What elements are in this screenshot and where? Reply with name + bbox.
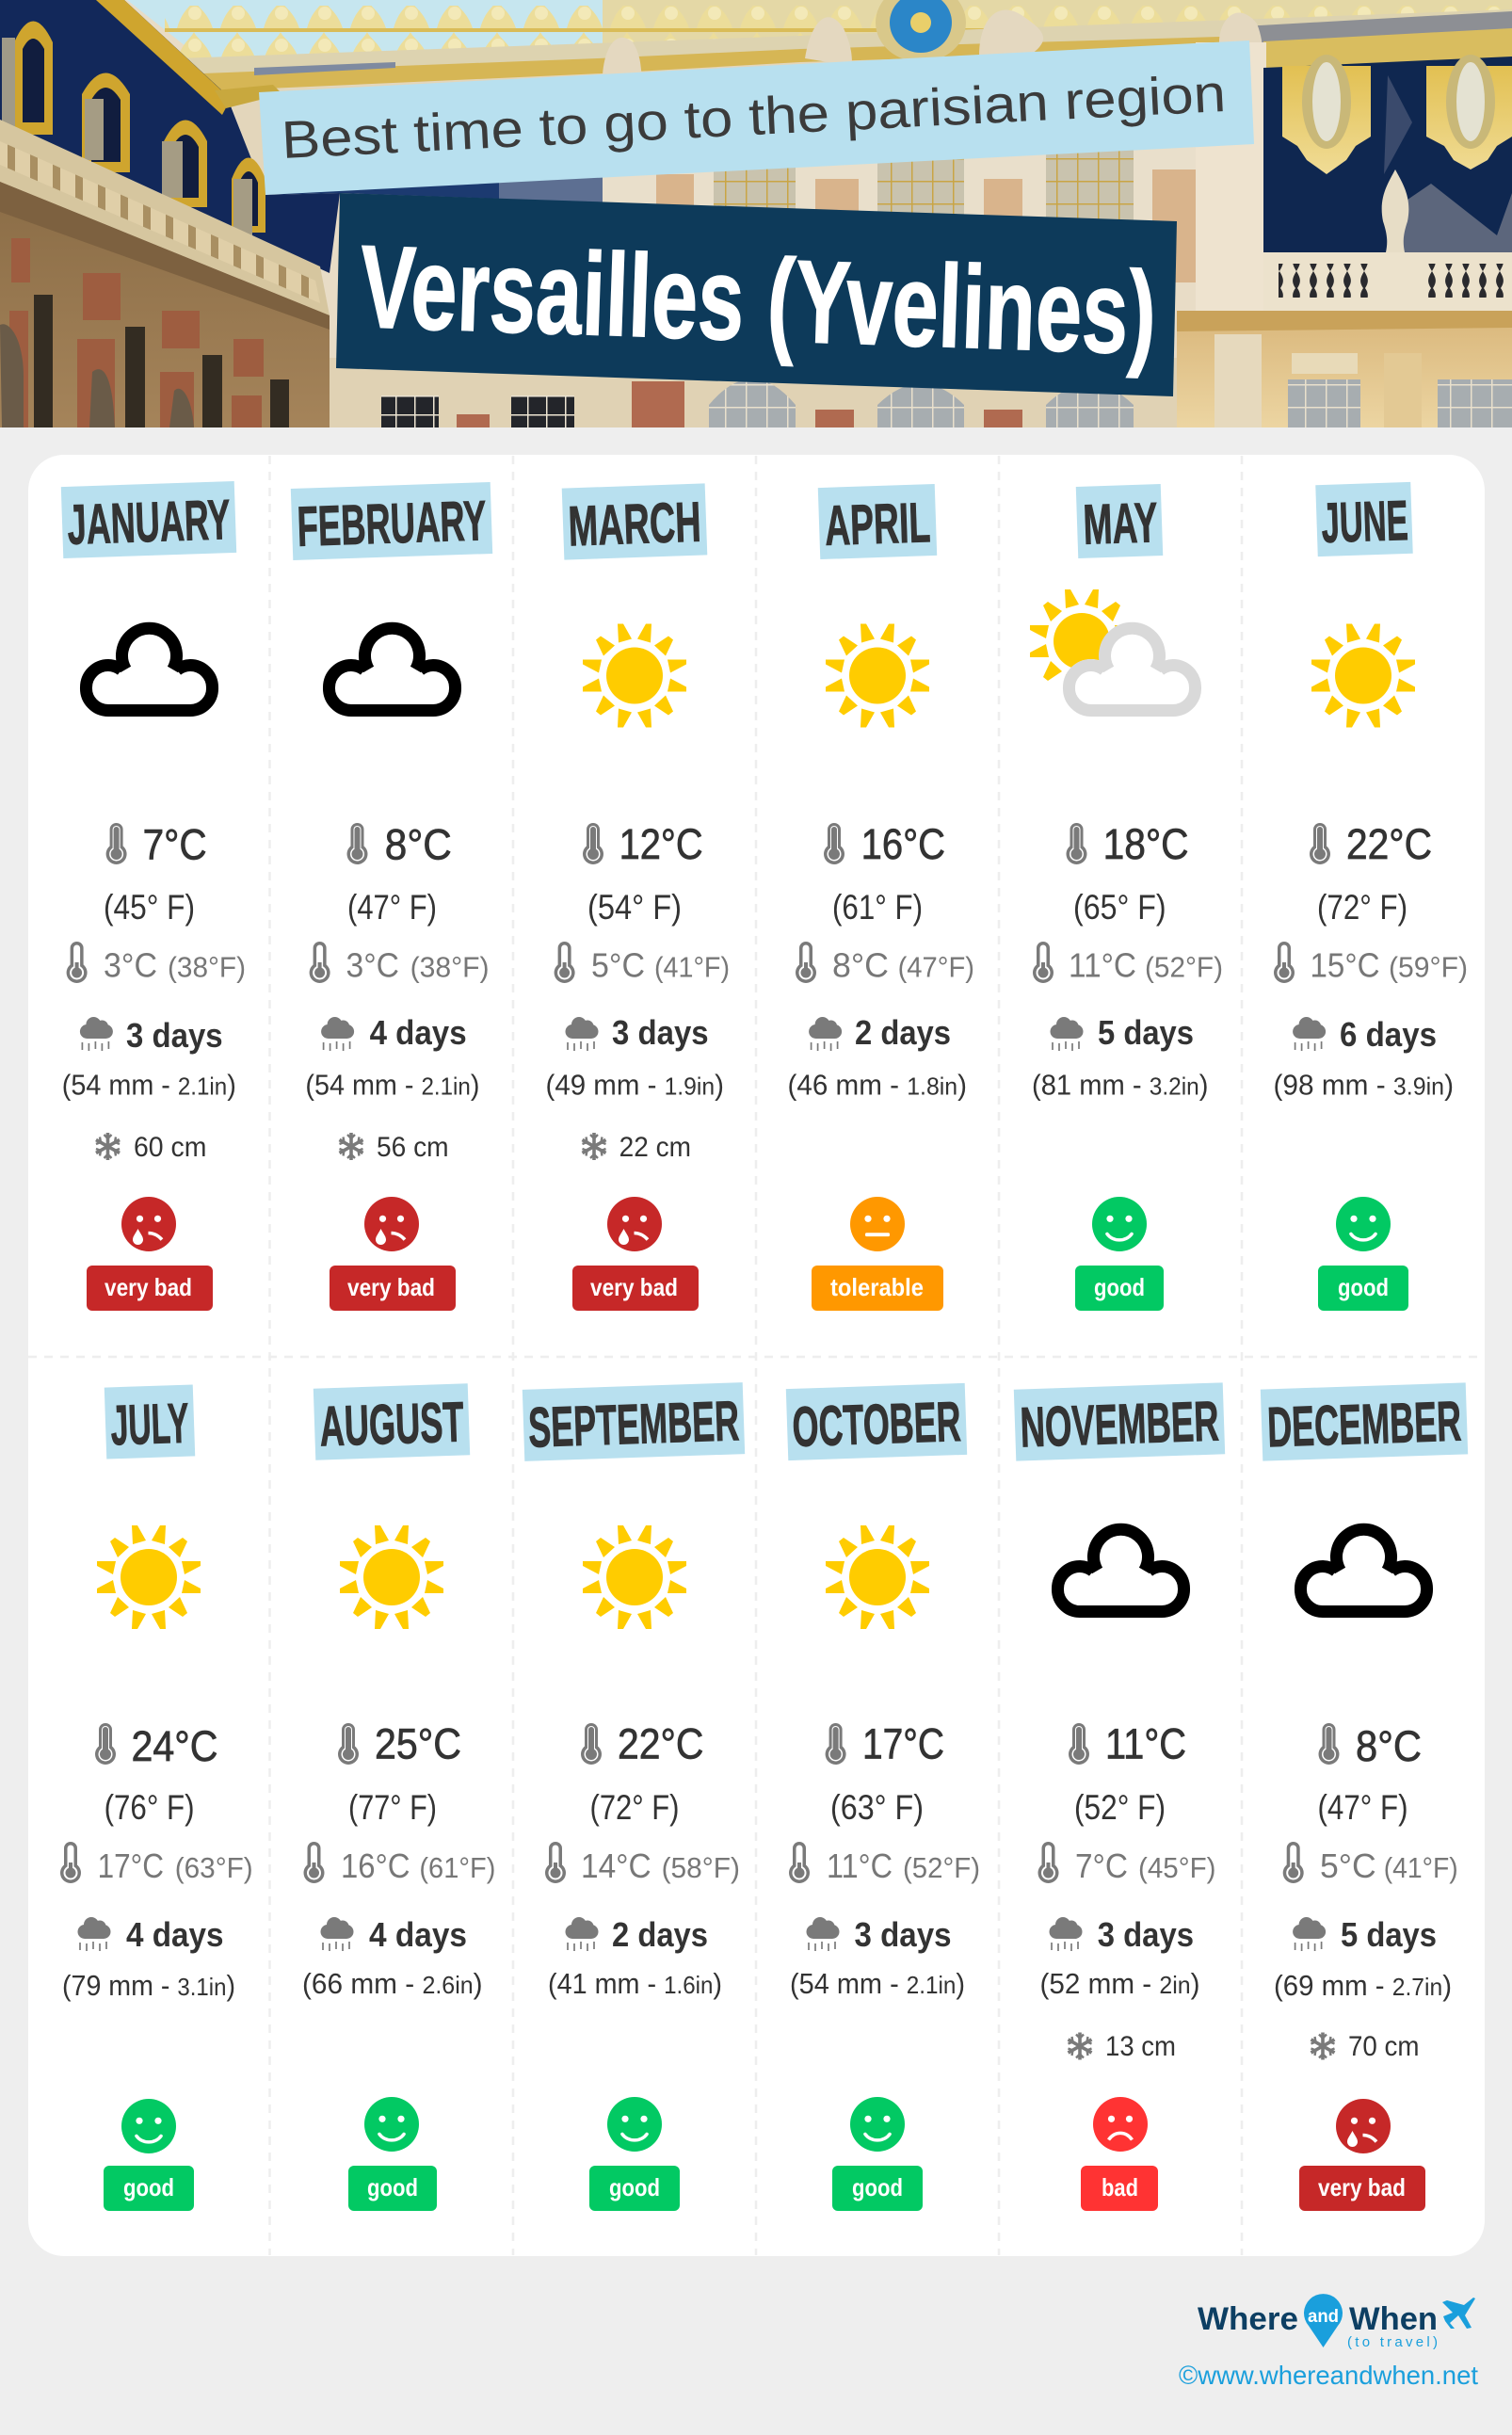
rainy days (1293, 1015, 1437, 1054)
average temperature (1310, 820, 1432, 927)
panel: july (60, 1384, 253, 2211)
low temperature: 5°C (1320, 1846, 1376, 1885)
precipitation: (81 mm - 3.2in) (1032, 1068, 1209, 1102)
panel: june (1273, 482, 1468, 1311)
average temperature (338, 1719, 461, 1827)
rating badge: good (1075, 1266, 1164, 1311)
rating face: very bad (364, 1197, 419, 1251)
average temperature: 16°C (861, 820, 945, 868)
rainy days (1293, 1915, 1437, 1954)
month label: august: AUGUST (319, 1390, 465, 1459)
rating badge: tolerable: tolerable (830, 1273, 924, 1301)
rainy days: 6 days (1340, 1015, 1437, 1054)
left balustrade and facade (0, 182, 330, 427)
average temperature: (47° F) (1318, 1788, 1408, 1827)
weather icon: sun (1311, 623, 1415, 727)
low temperature: 16°C (341, 1846, 410, 1885)
rating badge: good: good (123, 2173, 174, 2201)
average temperature: (52° F) (1074, 1788, 1166, 1827)
precipitation: (54 mm - 2.1in) (305, 1068, 479, 1102)
snowfall: 70 cm (1348, 2031, 1420, 2062)
month label: june: JUNE (1320, 489, 1409, 555)
rainy days: 4 days (370, 1013, 467, 1052)
average temperature: (47° F) (347, 888, 437, 927)
rainy days (1051, 1013, 1194, 1052)
month label: august (314, 1383, 470, 1460)
logo: Where and When: When (1349, 2301, 1438, 2337)
rating badge: good: good (609, 2173, 660, 2201)
rainy days (565, 1915, 708, 1954)
month label: june (1315, 482, 1413, 556)
rainy days: 5 days (1341, 1915, 1437, 1954)
weather icon: cloud (86, 628, 213, 710)
precipitation: (66 mm - 2.6in) (302, 1967, 483, 2000)
average temperature: (72° F) (1317, 888, 1407, 927)
low temperature (1274, 942, 1468, 985)
month label: january: JANUARY (67, 488, 232, 556)
average temperature (583, 820, 703, 927)
right roof, oval windows, balustrade (1196, 42, 1266, 315)
average temperature: 12°C (619, 820, 703, 868)
precipitation: (49 mm - 1.9in) (546, 1068, 724, 1102)
icon: airplane (1442, 2298, 1475, 2329)
low temperature: (41°F) (1384, 1851, 1458, 1884)
average temperature: (45° F) (104, 888, 195, 927)
average temperature (95, 1722, 218, 1827)
weather icon: sun (97, 1525, 201, 1629)
logo: Where and When: Where (1198, 2301, 1298, 2337)
low temperature (1033, 942, 1223, 985)
precipitation: (41 mm - 1.6in) (548, 1967, 722, 2000)
low temperature: 7°C (1075, 1846, 1128, 1885)
rainy days: 4 days (369, 1915, 467, 1954)
panel: december (1261, 1382, 1468, 2211)
average temperature: 24°C (132, 1722, 218, 1770)
rainy days: 3 days (1098, 1915, 1194, 1954)
rainy days (809, 1013, 951, 1052)
panel: april (787, 484, 974, 1311)
low temperature: 17°C (98, 1846, 164, 1885)
snowfall (1311, 2031, 1420, 2062)
average temperature (104, 821, 207, 927)
rainy days (77, 1915, 224, 1954)
rating badge: tolerable (812, 1266, 943, 1311)
panel: may (1030, 484, 1223, 1311)
low temperature: (52°F) (1145, 951, 1223, 983)
rating badge: very bad: very bad (590, 1273, 678, 1301)
low temperature: (61°F) (419, 1851, 495, 1884)
snowfall: 60 cm (134, 1132, 206, 1163)
icon: map pin (1304, 2294, 1343, 2347)
rainy days: 2 days (612, 1915, 708, 1954)
rainy days: 3 days (612, 1013, 709, 1052)
low temperature: (38°F) (410, 951, 490, 983)
header photo: palace of Versailles (0, 0, 1512, 427)
month label: october (786, 1383, 967, 1460)
low temperature: 5°C (591, 945, 645, 985)
average temperature: 22°C (1346, 820, 1432, 868)
low temperature: 3°C (104, 945, 157, 985)
weather icon: sun behind cloud (1030, 589, 1201, 716)
left roof (0, 0, 340, 273)
rainy days: 3 days (126, 1016, 223, 1055)
rating badge: good: good (367, 2173, 418, 2201)
low temperature: (52°F) (903, 1851, 980, 1884)
month label: march (562, 483, 707, 560)
precipitation: (54 mm - 2.1in) (62, 1068, 236, 1102)
average temperature: (61° F) (832, 888, 923, 927)
low temperature (796, 942, 974, 985)
average temperature: 8°C (385, 821, 452, 868)
panel: february (291, 482, 492, 1311)
snowfall (582, 1132, 691, 1163)
rating badge: very bad (572, 1266, 699, 1311)
average temperature (1069, 1719, 1186, 1827)
rating badge: good: good (1094, 1273, 1145, 1301)
month label: april (818, 484, 937, 559)
snowfall (1068, 2031, 1176, 2062)
month label: march: MARCH (567, 491, 702, 557)
panel: january (61, 481, 246, 1311)
average temperature (1066, 820, 1189, 927)
rating badge: bad: bad (1102, 2173, 1138, 2201)
low temperature (1037, 1842, 1216, 1885)
month label: may (1076, 484, 1163, 558)
month label: november: NOVEMBER (1020, 1390, 1220, 1459)
rating face: good (364, 2097, 419, 2152)
average temperature (1318, 1722, 1422, 1827)
rating face: very bad (607, 1197, 662, 1251)
precipitation: (54 mm - 2.1in) (790, 1967, 965, 2000)
month label: february (291, 482, 492, 560)
rainy days (320, 1915, 467, 1954)
panel: march (546, 483, 730, 1311)
month label: october: OCTOBER (792, 1390, 962, 1459)
weather icon: cloud (1300, 1529, 1427, 1612)
low temperature (789, 1842, 980, 1885)
rainy days: 4 days (126, 1915, 224, 1954)
rating badge: very bad (330, 1266, 456, 1311)
low temperature: (47°F) (898, 951, 974, 983)
copyright url: ©www.whereandwhen.net (1179, 2361, 1478, 2390)
rating badge: very bad (87, 1266, 213, 1311)
average temperature: 17°C (862, 1719, 944, 1768)
snowfall: 56 cm (377, 1132, 449, 1163)
rainy days (321, 1013, 467, 1052)
logo: Where and When: (to travel) (1347, 2334, 1438, 2350)
rainy days (806, 1915, 951, 1954)
low temperature: (63°F) (175, 1851, 253, 1884)
rating badge: very bad (1299, 2166, 1425, 2211)
panel: september (523, 1382, 745, 2211)
low temperature: (45°F) (1138, 1851, 1216, 1884)
rating face: good (121, 2099, 176, 2153)
average temperature (346, 821, 452, 927)
rating badge: good (832, 2166, 923, 2211)
title band: Versailles (Yvelines) (358, 221, 1158, 379)
rainy days: 5 days (1098, 1013, 1194, 1052)
low temperature (1283, 1842, 1458, 1885)
icon: map pin: and (1308, 2307, 1339, 2327)
low temperature (310, 942, 490, 985)
precipitation: (52 mm - 2in) (1039, 1967, 1199, 2000)
panel: august (302, 1383, 495, 2211)
low temperature: 11°C (827, 1846, 893, 1885)
rating face: bad (1093, 2097, 1148, 2152)
month label: may: MAY (1082, 491, 1159, 556)
rainy days (1049, 1915, 1194, 1954)
rating badge: bad (1081, 2166, 1158, 2211)
weather icon: cloud (329, 628, 456, 710)
rainy days (80, 1016, 223, 1055)
rating badge: good (589, 2166, 680, 2211)
average temperature: (77° F) (348, 1788, 437, 1827)
rainy days: 3 days (855, 1915, 951, 1954)
rating face: very bad (1336, 2099, 1391, 2153)
low temperature: 8°C (832, 945, 889, 985)
rating face: good (850, 2097, 905, 2152)
low temperature: 11°C (1069, 945, 1136, 985)
month label: november (1014, 1382, 1225, 1461)
panel: october (786, 1383, 980, 2211)
weather icon: sun (826, 1525, 929, 1629)
weather icon: sun (340, 1525, 443, 1629)
rating badge: very bad: very bad (1318, 2173, 1406, 2201)
low temperature: (38°F) (168, 951, 246, 983)
rating badge: very bad: very bad (105, 1273, 192, 1301)
low temperature: (59°F) (1389, 951, 1468, 983)
weather icon: sun (583, 623, 686, 727)
month label: july: JULY (109, 1392, 190, 1457)
weather icon: sun (826, 623, 929, 727)
central upper facade (603, 141, 1252, 235)
panel: monthly climate card (28, 455, 1485, 2256)
rating badge: very bad: very bad (347, 1273, 435, 1301)
low temperature: (41°F) (654, 951, 730, 983)
rating face: good (607, 2097, 662, 2152)
low temperature (67, 942, 246, 985)
snowfall (96, 1132, 206, 1163)
month label: july (105, 1384, 195, 1459)
subtitle band: Best time to go to the parisian region (280, 63, 1227, 169)
precipitation: (98 mm - 3.9in) (1273, 1068, 1454, 1102)
average temperature: (63° F) (830, 1788, 924, 1827)
month label: april: APRIL (824, 491, 931, 557)
subtitle band (259, 40, 1254, 195)
average temperature (824, 820, 945, 927)
average temperature: 11°C (1105, 1719, 1186, 1768)
precipitation: (46 mm - 1.8in) (787, 1068, 967, 1102)
average temperature: 18°C (1103, 820, 1189, 868)
rating badge: good (348, 2166, 437, 2211)
low temperature (545, 1842, 740, 1885)
average temperature: 7°C (143, 821, 207, 868)
low temperature: 15°C (1311, 945, 1380, 985)
rating badge: good (104, 2166, 194, 2211)
low temperature (303, 1842, 495, 1885)
average temperature: 25°C (375, 1719, 461, 1768)
low temperature: 14°C (581, 1846, 651, 1885)
low temperature (555, 942, 730, 985)
snowfall: 22 cm (619, 1132, 691, 1163)
snowfall (339, 1132, 449, 1163)
rainy days: 2 days (855, 1013, 951, 1052)
precipitation: (79 mm - 3.1in) (62, 1969, 235, 2002)
month label: september: SEPTEMBER (527, 1389, 740, 1459)
clock (876, 0, 966, 62)
month label: january (61, 481, 236, 558)
average temperature (581, 1719, 703, 1827)
rating badge: good: good (852, 2173, 903, 2201)
low temperature (60, 1842, 253, 1885)
low temperature: 3°C (346, 945, 399, 985)
month label: september (523, 1382, 745, 1461)
panel: november (1014, 1382, 1225, 2211)
average temperature: 8°C (1356, 1722, 1422, 1770)
rainy days (565, 1013, 709, 1052)
snowfall: 13 cm (1105, 2031, 1176, 2062)
central lower facade (330, 358, 1205, 427)
low temperature: (58°F) (662, 1851, 740, 1884)
logo: Where and When (1198, 2294, 1475, 2350)
average temperature: (65° F) (1073, 888, 1166, 927)
precipitation: (69 mm - 2.7in) (1274, 1969, 1452, 2002)
rating face: tolerable (850, 1197, 905, 1251)
month label: february: FEBRUARY (297, 489, 488, 558)
average temperature (826, 1719, 944, 1827)
title band (336, 193, 1177, 396)
weather icon: cloud (1057, 1529, 1184, 1612)
average temperature: 22°C (618, 1719, 703, 1768)
average temperature: (54° F) (587, 888, 682, 927)
weather icon: sun (583, 1525, 686, 1629)
rating face: good (1336, 1197, 1391, 1251)
rating face: very bad (121, 1197, 176, 1251)
average temperature: (76° F) (105, 1788, 195, 1827)
average temperature: (72° F) (589, 1788, 680, 1827)
rating badge: good (1318, 1266, 1408, 1311)
rating badge: good: good (1338, 1273, 1389, 1301)
rating face: good (1092, 1197, 1147, 1251)
